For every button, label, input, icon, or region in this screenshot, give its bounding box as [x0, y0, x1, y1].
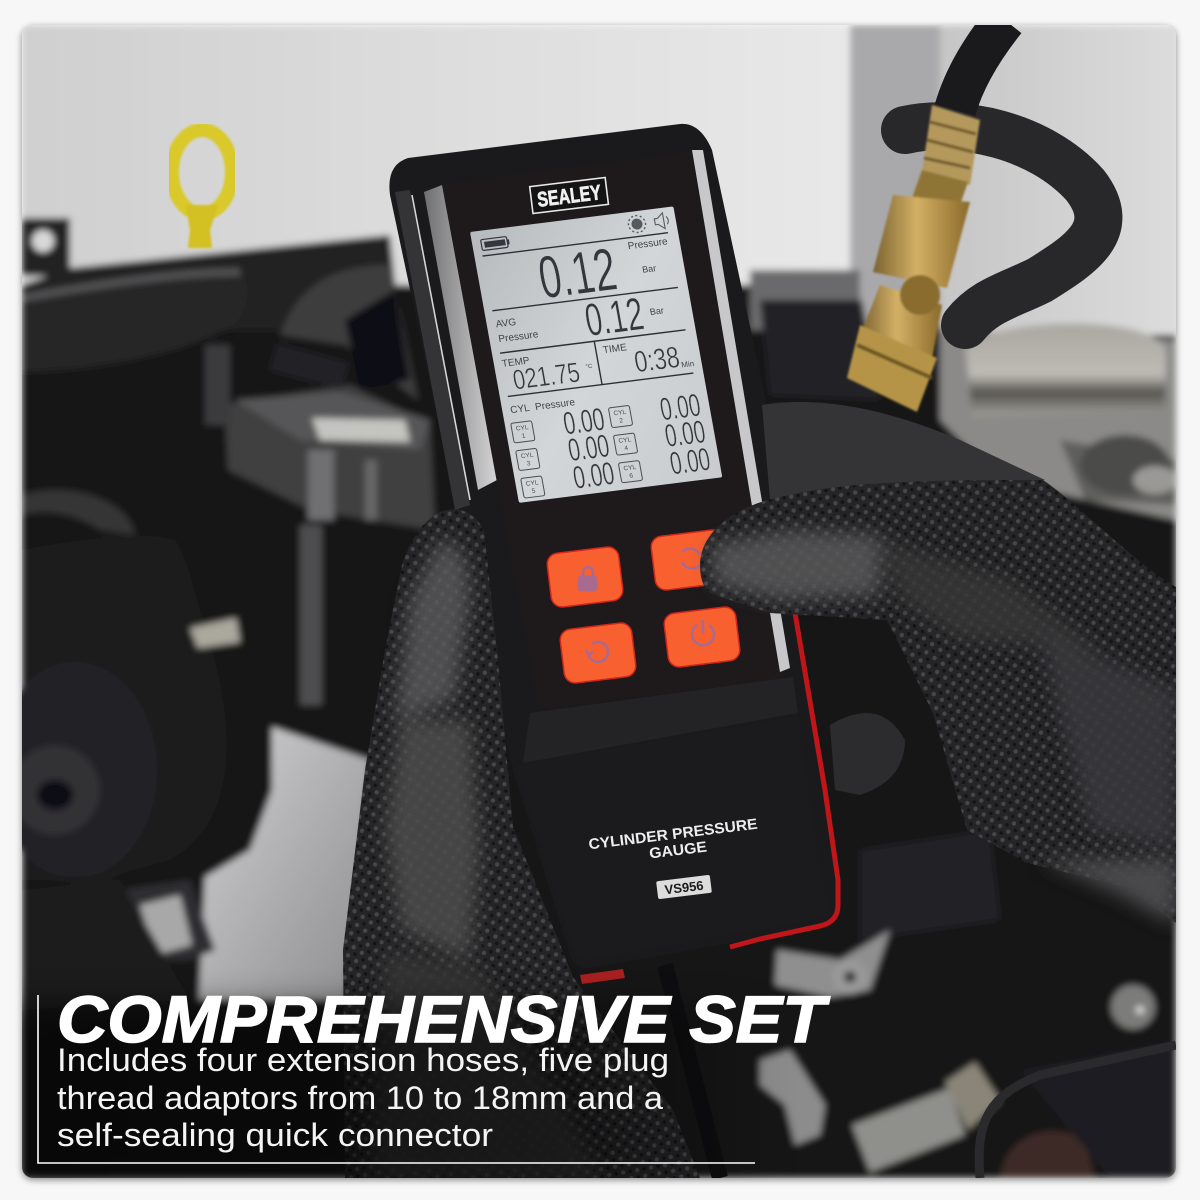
cylinder labels: 2	[619, 417, 624, 425]
body text: self-sealing quick connector	[57, 1117, 493, 1153]
LCD screen: °C	[585, 364, 594, 370]
palm and index finger	[700, 480, 1176, 923]
right gloved hand	[700, 402, 1176, 925]
glove smooth highlights	[370, 540, 600, 1178]
left gloved hand	[343, 509, 700, 1178]
readouts: 0.00	[570, 455, 617, 496]
cylinder labels: CYL	[515, 424, 530, 433]
button icons	[579, 549, 714, 662]
readouts: 0:38	[632, 341, 682, 379]
body text: thread adaptors from 10 to 18mm and a	[57, 1080, 663, 1116]
back finger behind device	[762, 402, 1045, 500]
caption frame	[38, 995, 755, 1163]
cylinder labels: 4	[624, 445, 629, 452]
readouts	[514, 248, 710, 488]
glove smooth highlights	[710, 530, 1176, 925]
oil dipstick ring, yellow	[172, 130, 232, 248]
right silver edge	[692, 150, 790, 672]
device body	[389, 124, 752, 334]
cylinder labels: CYL	[525, 479, 539, 488]
LCD screen: Pressure	[627, 236, 669, 252]
heading: COMPREHENSIVE SET	[57, 982, 830, 1056]
LCD screen: Bar	[641, 263, 657, 275]
left rim highlight	[395, 190, 470, 510]
readouts: 0.12	[533, 236, 622, 311]
black rubber hose ring, foreground right	[979, 1045, 1176, 1178]
readouts: 0.00	[662, 413, 708, 454]
red side strip	[730, 613, 838, 947]
LCD screen: TEMP	[501, 356, 531, 370]
body text	[57, 1042, 669, 1153]
cylinder labels: CYL	[520, 452, 534, 460]
cylinder labels: 1	[521, 433, 526, 440]
knuckle in dark gap	[830, 713, 905, 795]
printed product name: CYLINDER PRESSURE	[588, 816, 758, 853]
device: cylinder pressure gauge	[389, 124, 838, 984]
printed product name: GAUGE	[648, 839, 708, 862]
cable below device	[665, 965, 720, 1178]
corrugated black hose	[905, 126, 1098, 325]
cylinder labels: 6	[629, 472, 634, 480]
cylinder labels	[510, 405, 643, 498]
cylinder labels: CYL	[618, 436, 632, 445]
supply hose	[955, 20, 1005, 110]
LCD screen: Pressure	[498, 329, 540, 345]
body text: Includes four extension hoses, five plug	[57, 1042, 669, 1078]
cylinder labels: CYL	[623, 464, 637, 472]
brass quick connector	[847, 105, 980, 412]
sun and speaker icons	[627, 212, 670, 233]
readouts: 0.00	[560, 401, 607, 441]
readouts: 0.00	[657, 387, 703, 427]
readouts: 021.75	[510, 357, 582, 395]
readouts: 0.00	[667, 441, 713, 481]
ledge under keypad	[523, 677, 798, 763]
LCD screen: Min	[680, 359, 695, 369]
orange buttons	[546, 529, 741, 684]
readouts: 0.00	[565, 427, 612, 468]
bottom caption shade	[10, 1005, 780, 1195]
thin left white line	[412, 195, 470, 500]
LCD screen	[470, 206, 722, 503]
front bezel	[442, 186, 497, 480]
LCD screen: Bar	[649, 305, 665, 317]
red bottom accent	[580, 969, 625, 984]
cylinder labels: 5	[531, 488, 536, 495]
LCD screen: CYL Pressure	[509, 397, 576, 416]
LCD screen: TIME	[602, 342, 628, 356]
model tag VS956	[656, 875, 712, 899]
LCD screen: AVG	[495, 317, 517, 330]
readouts: 0.12	[581, 287, 648, 346]
model tag VS956: VS956	[664, 878, 704, 897]
SEALEY logo: SEALEY	[536, 181, 602, 212]
lower housing	[515, 716, 830, 960]
cylinder labels: 3	[526, 460, 531, 468]
left silver edge	[424, 185, 497, 490]
cylinder labels: CYL	[613, 409, 627, 417]
battery icon	[481, 236, 510, 251]
